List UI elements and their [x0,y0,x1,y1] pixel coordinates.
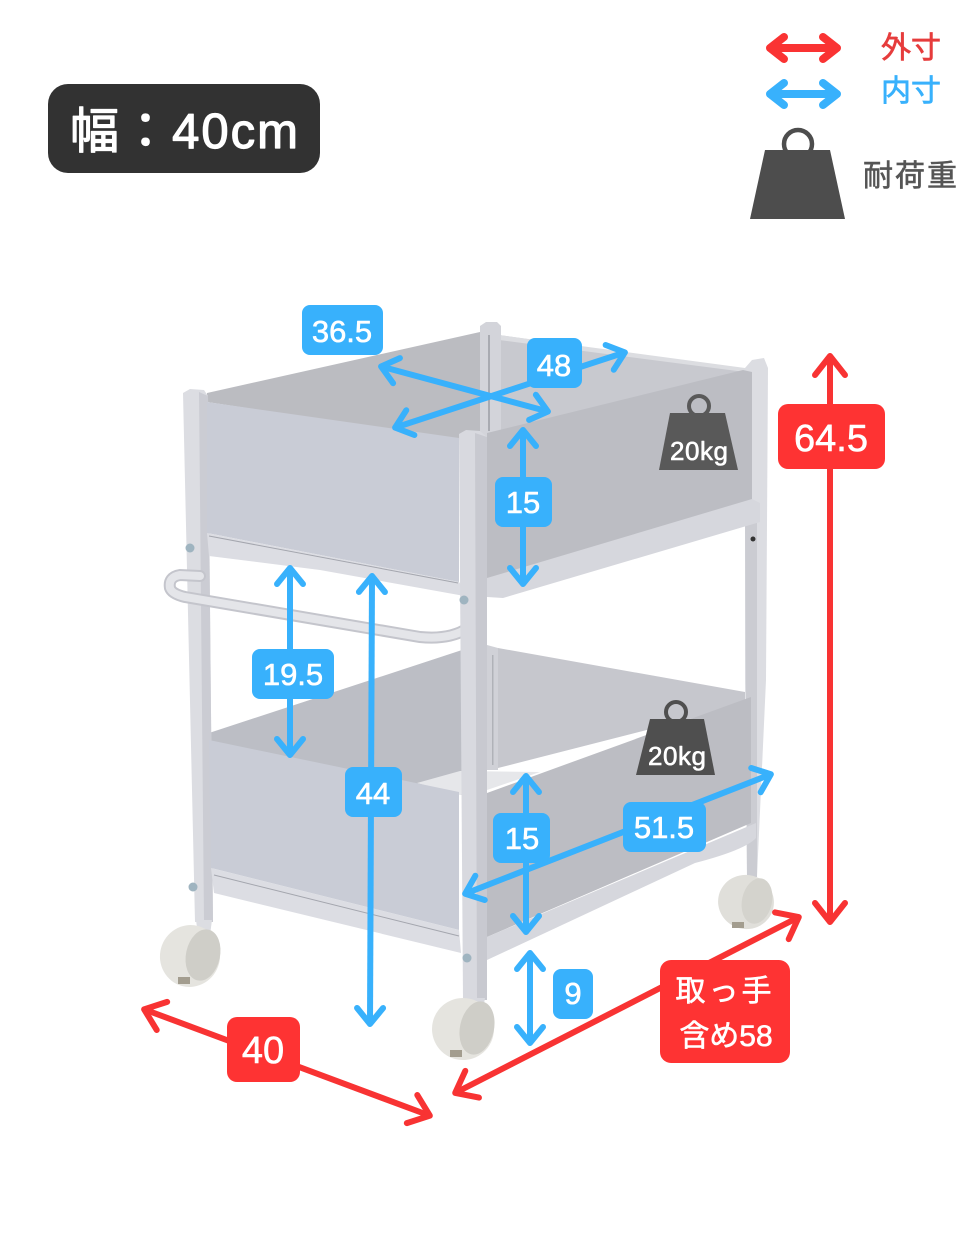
legend: inner dimension: 内寸 [881,75,941,108]
top basket right panel [487,370,760,598]
caster back right [712,869,780,935]
inner height 15 lower shelf [493,778,550,930]
width heading badge: 幅：40cm [70,105,298,159]
floor clearance 9: 9 [564,976,582,1011]
inner height 15 top shelf [495,432,552,582]
legend: load capacity [750,130,959,219]
cart illustration [153,322,780,1067]
front post [459,430,487,1000]
top basket interior [207,332,745,440]
caster back left [153,918,227,994]
outer depth 58 including handle: 含め58 [679,1020,773,1053]
outer height 64.5: 64.5 [794,418,868,460]
inner height 15 top shelf: 15 [506,485,540,520]
inner clearance 19.5 [252,570,334,753]
floor clearance 9 [530,955,593,1041]
back right post [745,358,768,877]
outer height 64.5 [778,358,885,920]
inner width 51.5 lower shelf: 51.5 [634,810,694,845]
legend: outer dimension [770,32,941,65]
legend: outer dimension: 外寸 [881,32,941,65]
load icon: lower shelf 20kg: 20kg [648,741,706,771]
inner height 44: 44 [356,776,390,811]
inner height 44 [345,578,402,1022]
outer depth 58 including handle: 取っ手 [676,975,774,1008]
inner height 15 lower shelf: 15 [505,821,539,856]
lower basket right panel [487,697,756,960]
inner clearance 19.5: 19.5 [263,657,323,692]
lower basket front panel [209,740,461,953]
outer width 40: 40 [242,1030,284,1072]
lower basket interior [209,648,745,795]
legend: load capacity: 耐荷重 [863,160,959,193]
inner width 48 dimension [397,338,623,427]
inner depth 36.5 dimension: 36.5 [312,314,372,349]
load icon: top shelf 20kg [659,396,738,470]
inner depth 36.5 dimension [302,305,546,411]
load icon: top shelf 20kg: 20kg [670,436,728,466]
outer width 40 [146,1010,428,1115]
back centre post [480,322,501,770]
outer depth 58 including handle [457,918,797,1092]
top basket front panel [207,402,470,597]
handle [170,575,468,638]
legend: inner dimension [770,75,941,108]
load icon: lower shelf 20kg [636,702,715,775]
width heading badge [48,84,320,173]
caster front [425,991,501,1067]
inner width 51.5 lower shelf [467,775,769,893]
inner width 48 dimension: 48 [537,348,571,383]
back left post [183,389,213,922]
